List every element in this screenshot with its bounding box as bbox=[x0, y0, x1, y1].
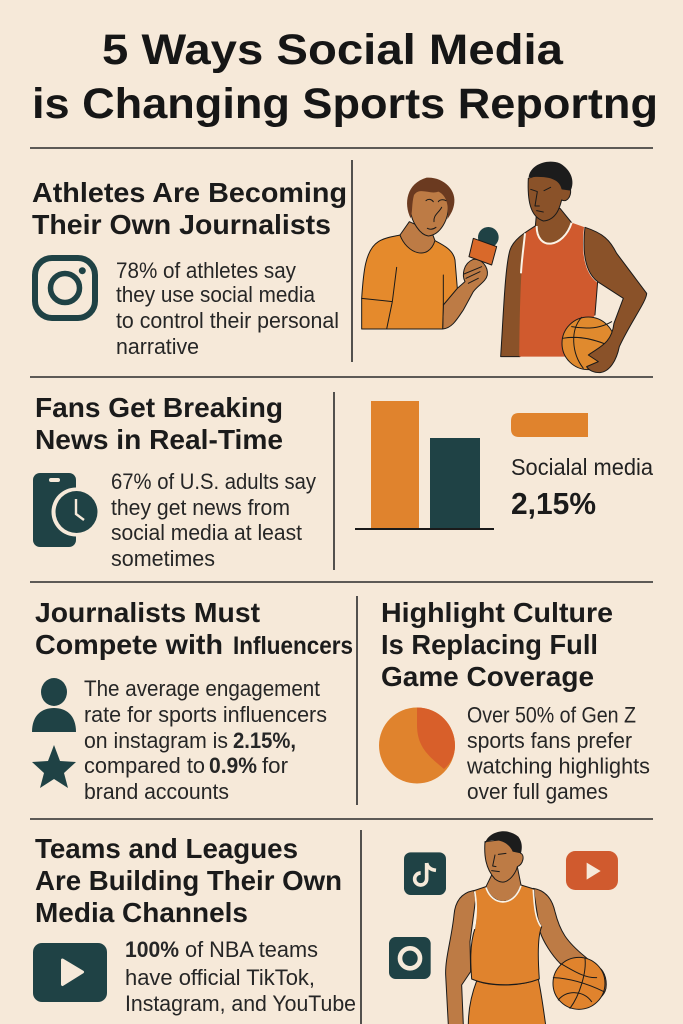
legend: social media: 2,15% bbox=[511, 486, 596, 521]
text: gen z statistic: over full games bbox=[467, 779, 608, 804]
panel: athletes are becoming their own journalists bbox=[32, 162, 647, 373]
text: athletes statistic: to control their personal bbox=[116, 308, 339, 333]
icon: tiktok bbox=[404, 852, 446, 895]
icon: video play bbox=[33, 943, 107, 1002]
text: engagement statistic: brand accounts bbox=[84, 779, 229, 804]
text: gen z statistic: sports fans prefer bbox=[467, 728, 632, 753]
text: fans statistic: 67% of U.S. adults say bbox=[111, 469, 316, 494]
heading: athletes bbox=[32, 177, 347, 240]
heading: highlight: Highlight Culture bbox=[381, 597, 613, 628]
text: fans statistic: they get news from bbox=[111, 495, 290, 520]
heading: athletes: Their Own Journalists bbox=[32, 209, 331, 240]
text: fans statistic bbox=[111, 469, 316, 571]
title: is Changing Sports Reportng bbox=[32, 80, 658, 128]
text: engagement statistic: The average engagement bbox=[84, 676, 320, 701]
heading: fans bbox=[35, 392, 283, 455]
heading: journalists: Influencers bbox=[233, 632, 353, 660]
text: nba statistic: of NBA teams bbox=[185, 937, 318, 962]
icon: youtube bbox=[566, 851, 618, 890]
icon: person bbox=[32, 678, 76, 732]
text: engagement statistic: compared to bbox=[84, 753, 205, 778]
text: nba statistic: have official TikTok, bbox=[125, 965, 315, 990]
text: engagement statistic: 0.9% bbox=[209, 753, 257, 778]
heading: highlight: Is Replacing Full bbox=[381, 629, 598, 660]
heading: fans: News in Real-Time bbox=[35, 424, 283, 455]
panel: highlight culture bbox=[379, 597, 650, 804]
heading: highlight: Game Coverage bbox=[381, 661, 594, 692]
text: engagement statistic bbox=[84, 676, 327, 804]
heading: athletes: Athletes Are Becoming bbox=[32, 177, 347, 208]
text: athletes statistic: narrative bbox=[116, 334, 199, 359]
pie chart bbox=[379, 708, 455, 784]
text: engagement statistic: on instagram is bbox=[84, 728, 228, 753]
text: athletes statistic: they use social media bbox=[116, 282, 316, 307]
text: nba statistic: Instagram, and YouTube bbox=[125, 991, 356, 1016]
bar chart bbox=[355, 401, 494, 530]
icon: star bbox=[32, 745, 76, 788]
text: athletes statistic: 78% of athletes say bbox=[116, 258, 296, 283]
text: engagement statistic: for bbox=[262, 753, 288, 778]
heading: fans: Fans Get Breaking bbox=[35, 392, 283, 423]
heading: teams: Are Building Their Own bbox=[35, 865, 342, 896]
illustration: reporter interviewing athlete bbox=[362, 162, 647, 373]
panel: teams and leagues bbox=[33, 831, 618, 1024]
text: athletes statistic bbox=[116, 258, 339, 359]
heading: teams bbox=[35, 833, 342, 928]
text: nba statistic: 100% bbox=[125, 937, 179, 962]
heading: journalists: Compete with bbox=[35, 629, 223, 660]
text: engagement statistic: rate for sports influencers bbox=[84, 702, 327, 727]
heading: highlight bbox=[381, 597, 613, 692]
legend: social media bbox=[511, 413, 653, 521]
heading: journalists bbox=[35, 597, 353, 660]
heading: journalists: Journalists Must bbox=[35, 597, 260, 628]
panel: fans get breaking news bbox=[33, 392, 653, 571]
reporter bbox=[362, 178, 499, 329]
text: fans statistic: sometimes bbox=[111, 546, 215, 571]
panel: journalists must compete with influencers bbox=[32, 597, 353, 804]
heading: teams: Teams and Leagues bbox=[35, 833, 298, 864]
text: fans statistic: social media at least bbox=[111, 520, 302, 545]
text: gen z statistic bbox=[466, 702, 650, 804]
title: 5 Ways Social Media bbox=[102, 26, 564, 74]
icon: phone with clock bbox=[33, 473, 100, 547]
icon: instagram circle bbox=[389, 937, 431, 979]
text: nba statistic bbox=[125, 937, 356, 1024]
title bbox=[32, 26, 658, 128]
text: engagement statistic: 2.15%, bbox=[233, 728, 296, 753]
heading: teams: Media Channels bbox=[35, 897, 248, 928]
icon: instagram bbox=[35, 258, 95, 318]
text: gen z statistic: Over 50% of Gen Z bbox=[467, 702, 636, 728]
legend: social media: Socialal media bbox=[511, 454, 653, 480]
illustration: basketball player bbox=[446, 831, 606, 1024]
athlete bbox=[501, 162, 647, 373]
text: gen z statistic: watching highlights bbox=[466, 754, 650, 778]
